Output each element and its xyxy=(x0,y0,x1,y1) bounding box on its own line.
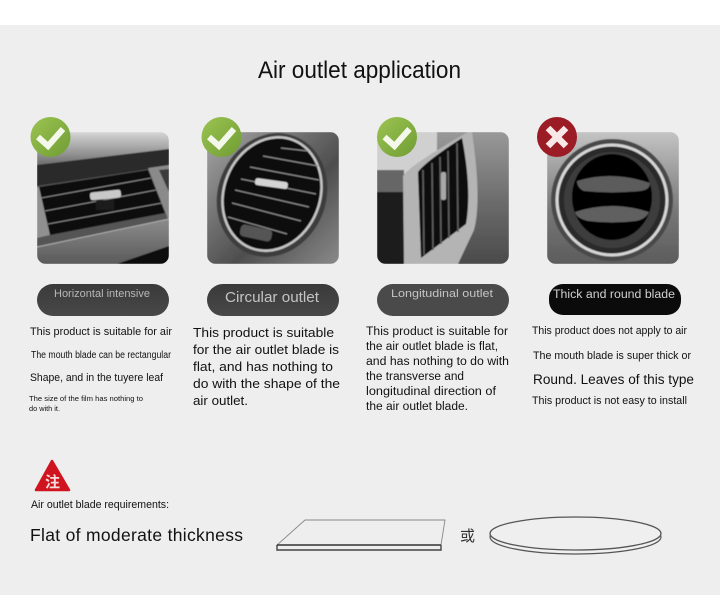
pill: circular outlet xyxy=(207,284,339,316)
text block: longitudinal outlet description: the transverse and xyxy=(366,371,464,383)
text block: thick and round blade description: This product does not apply to air xyxy=(532,325,687,337)
badge: check 3 xyxy=(377,117,417,157)
requirement text: Flat of moderate thickness xyxy=(30,525,243,545)
photo: circular vent xyxy=(207,132,339,264)
text block: thick and round blade description xyxy=(532,325,694,407)
badge: cross 4 xyxy=(537,117,577,157)
text block: thick and round blade description: This product is not easy to install xyxy=(532,395,687,407)
text block: horizontal intensive description: Shape, and in the tuyere leaf xyxy=(30,372,164,384)
pill: circular outlet: Circular outlet xyxy=(225,290,319,306)
text block: horizontal intensive description: This product is suitable for air xyxy=(30,326,172,338)
pill: thick and round blade xyxy=(549,284,681,315)
text block: horizontal intensive description: The size of the film has nothing to xyxy=(29,394,143,403)
photo: horizontal vent xyxy=(37,132,169,264)
text block: longitudinal outlet description: the air outlet blade is flat, xyxy=(366,341,498,353)
badge: check 2 xyxy=(202,117,242,157)
diagram: flat oval blade xyxy=(490,517,661,554)
icon: red warning triangle: 注 xyxy=(45,473,60,491)
pill: horizontal intensive: Horizontal intensive xyxy=(54,288,150,300)
text block: thick and round blade description: The mouth blade is super thick or xyxy=(533,350,691,362)
label: or: 或 xyxy=(460,528,475,545)
text block: circular outlet description: do with the shape of the xyxy=(193,376,340,391)
photo: thick round vent xyxy=(547,132,679,264)
pill: horizontal intensive xyxy=(37,284,169,316)
text block: circular outlet description: for the air outlet blade is xyxy=(193,342,340,357)
title: Air outlet application xyxy=(258,57,461,84)
pill: thick and round blade: Thick and round blade xyxy=(553,289,675,301)
text block: longitudinal outlet description: longitudinal direction of xyxy=(366,386,497,398)
pill: longitudinal outlet: Longitudinal outlet xyxy=(391,288,493,300)
photo: longitudinal vent xyxy=(377,132,509,264)
badge: check 1 xyxy=(30,117,70,157)
text block: horizontal intensive description xyxy=(29,326,172,413)
text block: longitudinal outlet description xyxy=(366,326,509,413)
pill: longitudinal outlet xyxy=(377,284,509,316)
text block: circular outlet description: flat, and has nothing to xyxy=(193,359,333,374)
text block: thick and round blade description: Round. Leaves of this type xyxy=(533,372,694,387)
text block: horizontal intensive description: The mouth blade can be rectangular xyxy=(31,350,172,361)
text block: longitudinal outlet description: This product is suitable for xyxy=(366,326,508,338)
text block: longitudinal outlet description: and has nothing to do with xyxy=(366,356,509,368)
diagram: flat rectangular blade xyxy=(277,520,445,550)
text block: longitudinal outlet description: the air outlet blade. xyxy=(366,401,468,413)
note heading: Air outlet blade requirements: xyxy=(31,499,169,511)
text block: horizontal intensive description: do with it. xyxy=(29,404,60,413)
text block: circular outlet description xyxy=(193,325,340,408)
icon: red warning triangle xyxy=(36,461,69,491)
text block: circular outlet description: This product is suitable xyxy=(193,325,334,340)
text block: circular outlet description: air outlet. xyxy=(193,393,248,408)
